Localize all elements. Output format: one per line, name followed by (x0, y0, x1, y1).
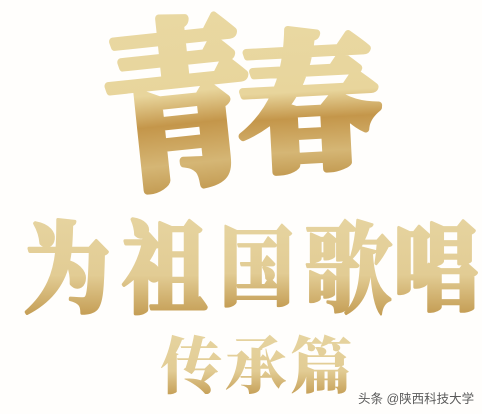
section label: 传承篇: 传承篇 (160, 333, 355, 402)
character: 为: 为 (24, 214, 110, 325)
character: 春: 春 (234, 18, 384, 192)
character: 青: 青 (96, 2, 262, 215)
subtitle: 为祖国歌唱 (24, 214, 478, 325)
watermark: 头条 @陕西科技大学 (358, 391, 474, 406)
character: 国: 国 (220, 221, 294, 316)
character: 唱: 唱 (394, 216, 478, 323)
title: 青春 (96, 2, 384, 215)
character: 歌: 歌 (304, 214, 392, 325)
character: 祖: 祖 (122, 214, 208, 325)
